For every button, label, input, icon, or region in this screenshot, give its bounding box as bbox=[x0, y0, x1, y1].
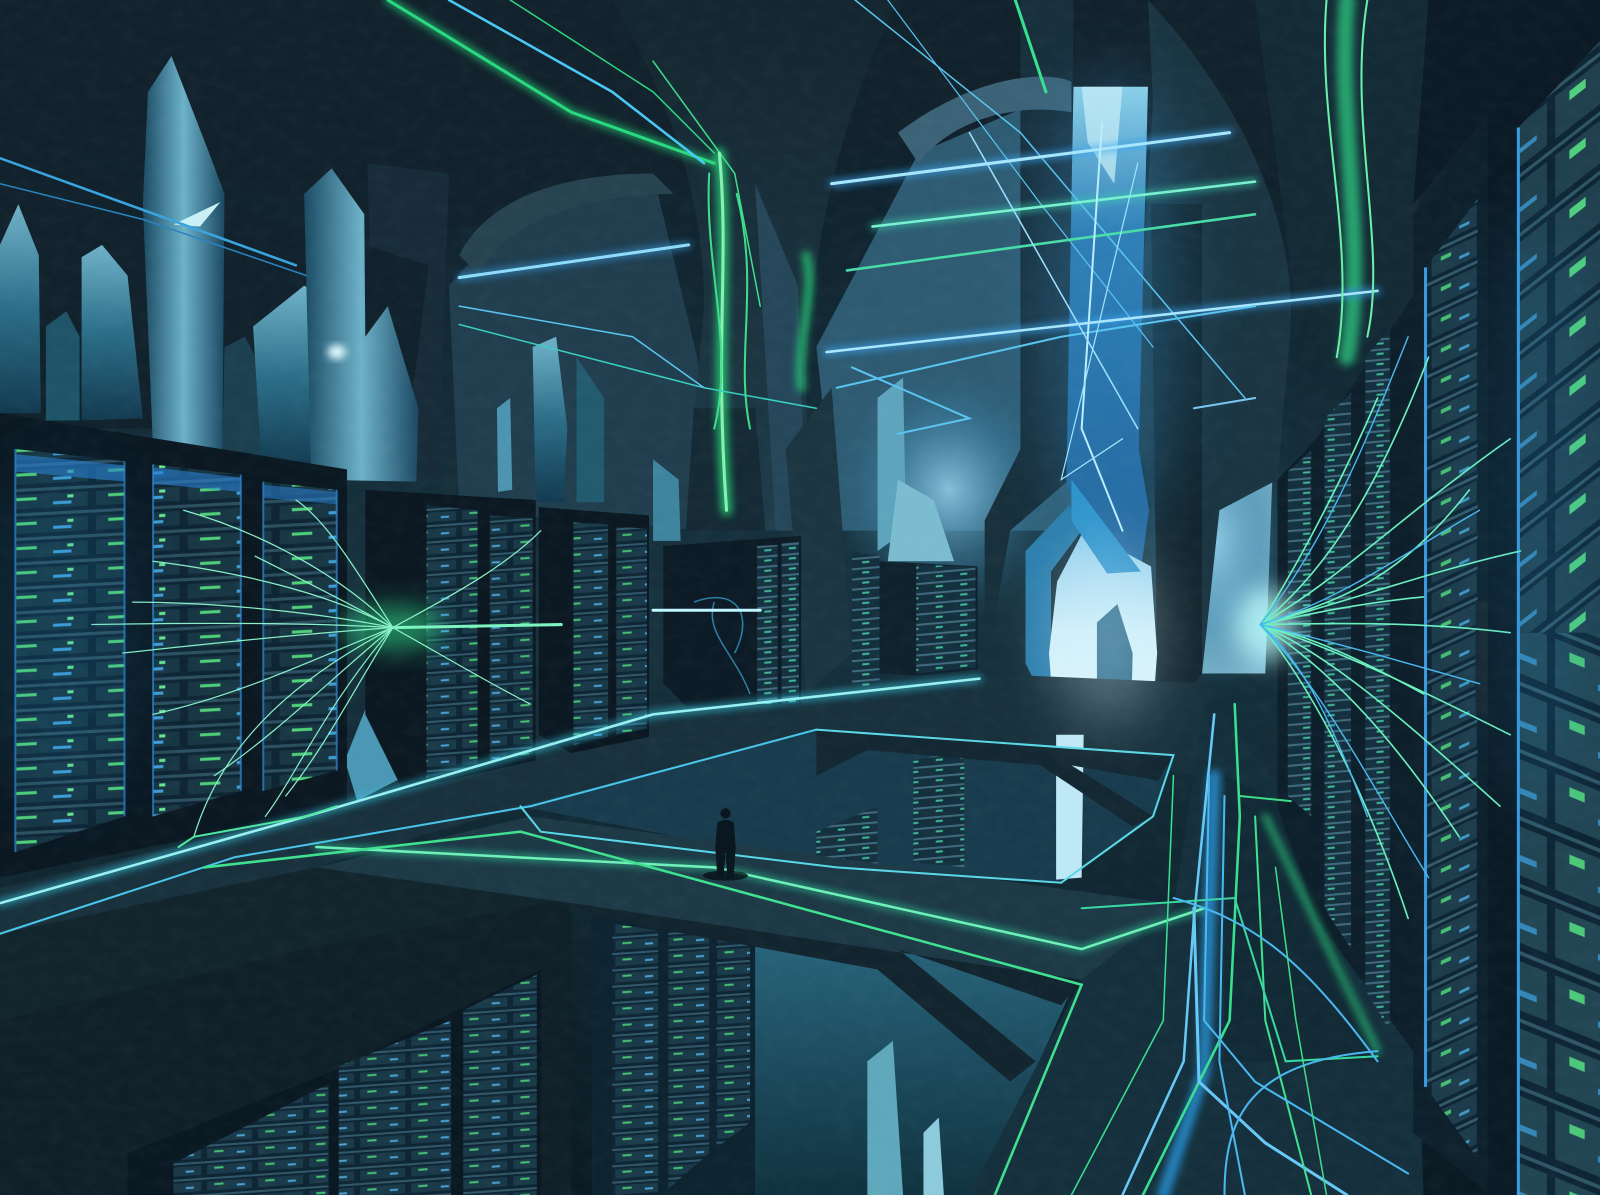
human figure on bridge bbox=[703, 808, 748, 881]
atmospheric glow bbox=[0, 204, 1600, 816]
server racks left row bbox=[0, 413, 347, 878]
chasm opening with reflected light bbox=[520, 730, 1173, 1195]
server racks middle rows bbox=[365, 490, 978, 791]
reflected racks below bbox=[128, 913, 944, 1195]
crystal cluster left bbox=[0, 56, 418, 482]
far floor and left walkway bbox=[0, 674, 1214, 1195]
cave ceiling and back walls bbox=[0, 0, 1600, 694]
right floor corridor bbox=[969, 694, 1423, 1195]
glowing data streams upper blue and green bbox=[0, 0, 1378, 531]
stone bridge bbox=[316, 730, 1204, 1082]
right fan of light lines bbox=[1235, 337, 1520, 918]
server racks right wall bbox=[1278, 0, 1600, 1195]
rock pillars and arches bbox=[459, 0, 1600, 735]
left fan of light lines bbox=[92, 500, 760, 837]
central glowing crystal column bbox=[1026, 71, 1184, 735]
crystals mid distance bbox=[345, 337, 954, 801]
floor light circuits bbox=[0, 679, 1408, 1195]
